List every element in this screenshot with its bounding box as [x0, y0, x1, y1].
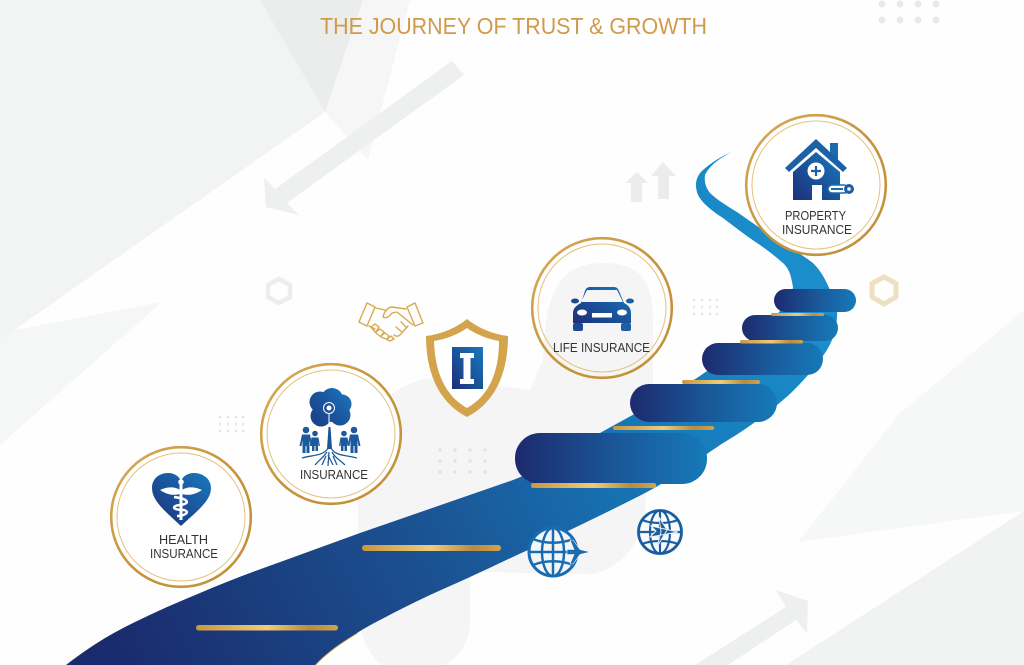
- icon: gold hexagon: [872, 277, 896, 304]
- road gold dash upper: [362, 545, 501, 551]
- stair step 2 gold edge: [613, 426, 714, 430]
- label: property insurance: [782, 208, 852, 237]
- panel: property insurance: [746, 115, 886, 255]
- icon: handshake: [359, 303, 423, 341]
- ribbon path with stairs: [66, 152, 856, 665]
- icon: twin up arrows: [625, 162, 676, 202]
- stair step 4 gold edge: [740, 340, 803, 344]
- stair step 4: [742, 315, 838, 341]
- label: property insurance: PROPERTY: [785, 208, 846, 223]
- stair step 5 gold edge: [771, 313, 824, 316]
- icon: grey hexagon: [268, 279, 290, 303]
- panel: insurance: [261, 364, 401, 504]
- arrow: large background arrow pointing up-right: [695, 590, 808, 665]
- road gold dash lower: [196, 625, 338, 630]
- icon: family tree: [300, 388, 360, 466]
- dot grid: below shield: [438, 448, 487, 474]
- icon: heart with caduceus: [152, 473, 211, 526]
- stair step 1: [515, 433, 707, 484]
- label: health insurance: INSURANCE: [150, 546, 218, 561]
- label: life insurance: LIFE INSURANCE: [553, 340, 650, 355]
- label: property insurance: INSURANCE: [782, 222, 852, 237]
- stair step 1 gold edge: [531, 483, 656, 488]
- ribbon road: [66, 152, 837, 665]
- icon: globe with airplane: [638, 510, 682, 554]
- stair step 5: [774, 289, 856, 312]
- label: insurance: INSURANCE: [300, 467, 368, 482]
- dot grid: left of insurance circle: [219, 416, 244, 432]
- dot grid: right of life circle: [693, 299, 718, 315]
- arrow: large background arrow pointing down-left: [264, 61, 464, 215]
- dot grid: top right: [878, 0, 940, 24]
- stair step 3 gold edge: [682, 380, 760, 384]
- ribbon gold edge: [315, 633, 357, 665]
- label: health insurance: [150, 532, 218, 561]
- label: health insurance: HEALTH: [159, 532, 208, 547]
- stair step 3: [702, 343, 823, 375]
- panel: life insurance: [532, 238, 672, 378]
- icon: gold shield with I badge: [426, 319, 508, 417]
- icon: house with key: [785, 139, 854, 200]
- panel: health insurance: [111, 447, 251, 587]
- icon: globe with plane: [529, 528, 590, 576]
- stair step 2: [630, 384, 777, 422]
- title: THE JOURNEY OF TRUST & GROWTH: [320, 13, 707, 39]
- icon: car: [571, 287, 634, 331]
